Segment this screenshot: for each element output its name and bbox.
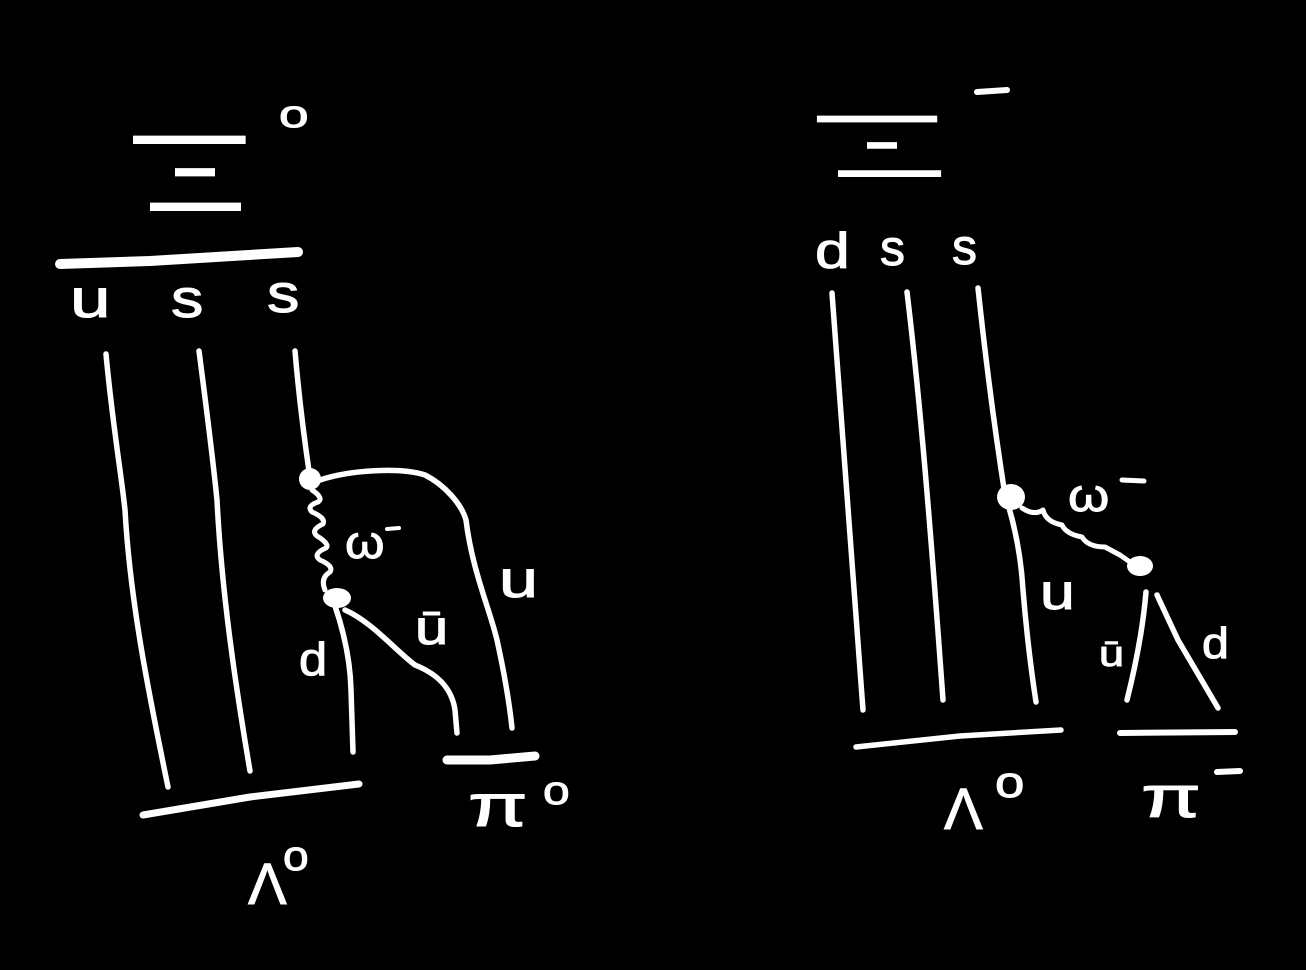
quark line: d [1157, 595, 1218, 708]
label: d: d [299, 634, 327, 685]
quark line: anti-u [1127, 592, 1146, 700]
labels: quarks u s s: s [267, 263, 299, 324]
heading: Xi zero: Ξ [120, 111, 259, 234]
label: pi zero: o [543, 769, 570, 813]
label: Lambda zero [944, 758, 1024, 842]
quark line: anti-u [345, 610, 457, 733]
label: pi zero: π [468, 772, 528, 839]
quark line: d [335, 606, 353, 752]
label: anti-u: ū [1099, 633, 1124, 674]
label: anti-u: ū [415, 600, 448, 655]
label: u: u [499, 551, 538, 609]
label: Lambda zero [248, 833, 309, 917]
quark line: s to vertex [295, 351, 310, 478]
label: u: u [1040, 564, 1075, 620]
label: pi minus [1141, 764, 1240, 830]
vertex: weak s decay [997, 484, 1025, 510]
labels: quarks d s s: s [952, 219, 977, 275]
label: W minus: ω [1068, 469, 1109, 521]
quark line: u to pion [320, 470, 512, 728]
label: W minus: ω [345, 517, 385, 568]
vertex: weak s decay [299, 468, 321, 490]
W boson wiggle [310, 490, 331, 590]
quark line: u [106, 354, 168, 787]
quark line: s spectator [199, 351, 250, 771]
heading: Xi minus: Ξ [803, 96, 951, 196]
labels: quarks d s s: d [815, 223, 850, 279]
labels: quarks u s s [70, 263, 299, 329]
quark line: d [832, 293, 863, 710]
vertex: W decay [1127, 556, 1153, 576]
label: pi zero [468, 769, 570, 839]
W boson wiggle [1022, 508, 1130, 562]
labels: quarks d s s [815, 219, 977, 279]
bar: pion [1120, 732, 1235, 733]
label: d: d [1202, 618, 1229, 668]
bar: Lambda [143, 784, 359, 815]
heading: Xi zero [120, 92, 309, 234]
panel: neutral Xi decay [60, 92, 570, 917]
bar: Lambda [856, 730, 1061, 747]
vertex: W decay [323, 588, 351, 608]
label: Lambda zero: o [995, 758, 1024, 807]
label: Lambda zero: o [283, 833, 309, 880]
quark line: s spectator [907, 292, 943, 700]
labels: quarks u s s: u [70, 268, 111, 329]
label: pi minus: π [1141, 764, 1201, 830]
label: W minus [1068, 469, 1144, 521]
heading: Xi minus [800, 90, 1007, 196]
label: Lambda zero: Λ [944, 777, 983, 842]
label: Lambda zero: Λ [248, 852, 287, 917]
labels: quarks d s s: s [880, 220, 905, 276]
quark line: s to u [978, 288, 1036, 702]
labels: quarks u s s: s [171, 268, 203, 329]
bar: pion [447, 756, 535, 760]
heading: Xi zero: o [279, 92, 309, 135]
panel: charged Xi decay [800, 90, 1240, 842]
bar: top of u s s baryon [60, 252, 298, 264]
